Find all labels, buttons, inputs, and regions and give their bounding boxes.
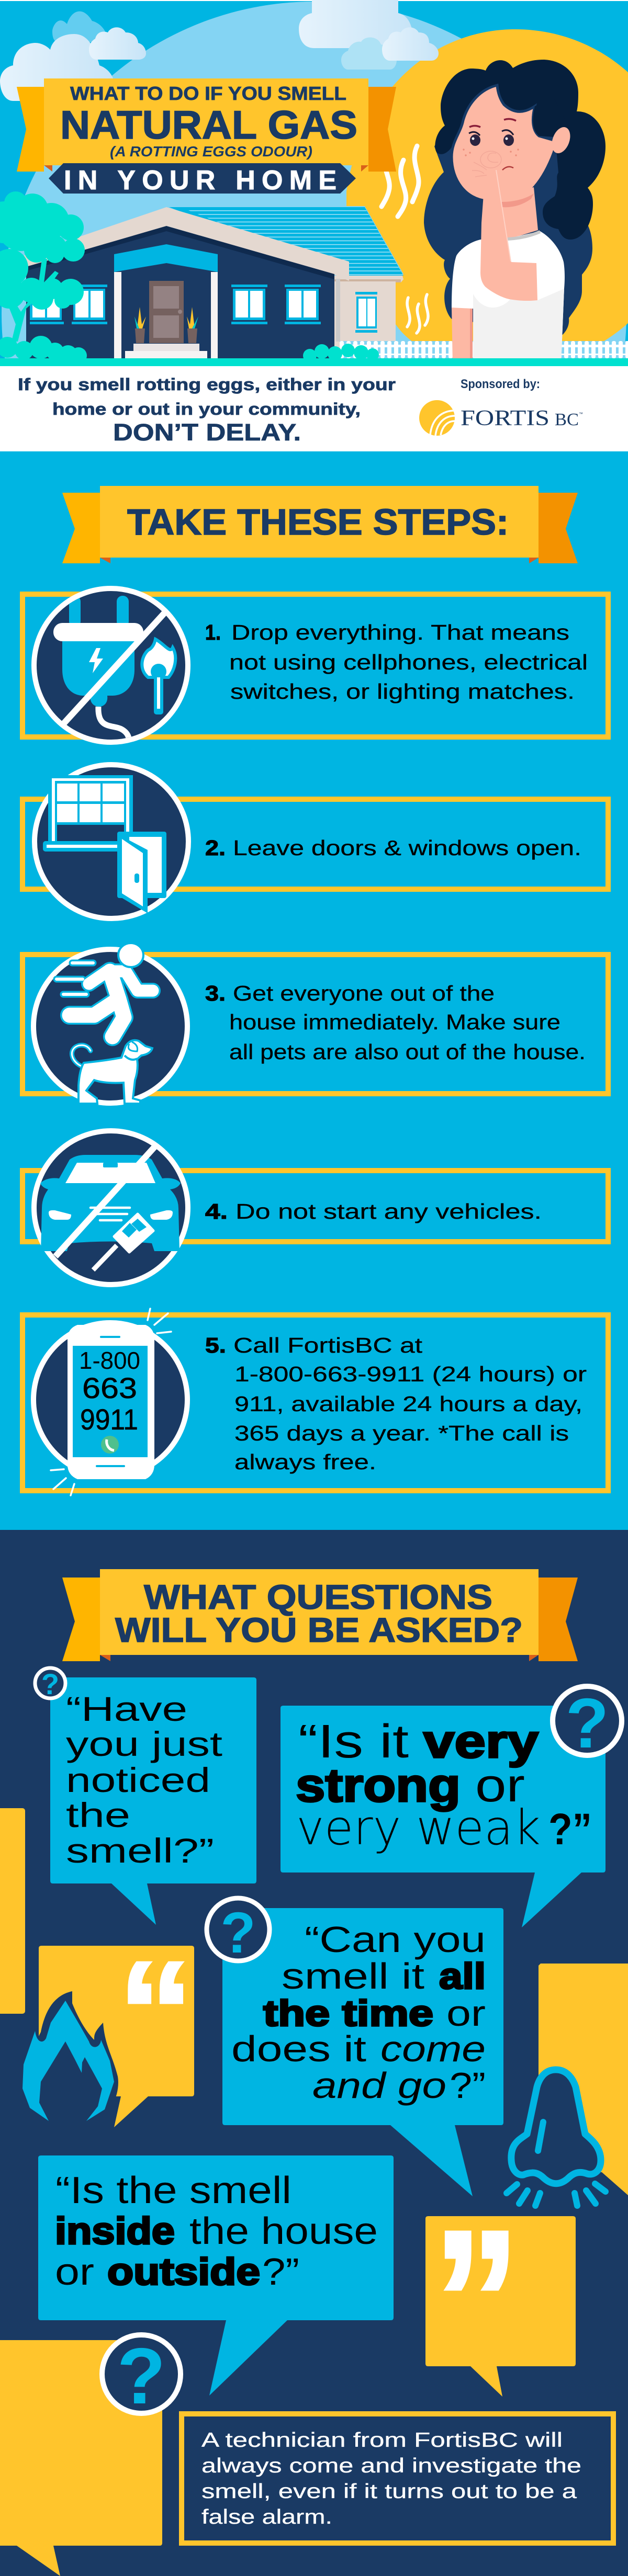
runner	[57, 963, 153, 1037]
bubble: inside or outside: ?”	[262, 2251, 299, 2293]
bubble: all the time: come	[380, 2028, 486, 2069]
step 2 text: 2.	[205, 836, 226, 860]
callout: technician note: smell, even if it turns out to be a	[201, 2480, 577, 2503]
door	[117, 832, 166, 913]
bubble: very strong or very weak: or	[475, 1760, 525, 1812]
yellow bubble behind nose	[539, 1964, 628, 2195]
bubble: have you just noticed: the	[66, 1796, 130, 1834]
door	[149, 281, 184, 343]
bubble: inside or outside: outside	[107, 2251, 260, 2293]
panel: hero illustration	[0, 0, 628, 366]
title text: NATURAL GAS	[60, 103, 357, 147]
yellow bubble: closing quote	[425, 2187, 576, 2417]
back hair	[424, 105, 592, 335]
t-shirt	[452, 231, 565, 365]
step 2 text: Leave doors & windows open.	[233, 836, 581, 860]
title text: WHAT TO DO IF YOU SMELL	[70, 83, 346, 104]
house back roof	[169, 207, 403, 358]
step 5 text: 365 days a year. *The call is	[234, 1421, 569, 1445]
windows	[30, 285, 321, 324]
bubble: inside or outside	[38, 2155, 394, 2396]
porch	[114, 244, 218, 358]
match	[142, 639, 175, 714]
eyes, brows, mouth	[463, 119, 519, 170]
step 3 text: Get everyone out of the	[233, 981, 495, 1005]
face	[452, 85, 557, 203]
phone number: 663	[82, 1371, 137, 1404]
step 3	[23, 943, 608, 1104]
step 5	[23, 1309, 608, 1495]
callout: technician note: false alarm.	[201, 2506, 332, 2528]
title text: IN YOUR HOME	[64, 165, 337, 196]
intro text: home or out in your community,	[52, 400, 361, 418]
step 3 text: 3.	[205, 981, 226, 1005]
bubble: very strong or very weak: ?”	[548, 1805, 592, 1854]
icon: no plug, no match	[34, 588, 188, 743]
intro text	[18, 375, 396, 446]
bubble: all the time: all	[439, 1956, 486, 1996]
bubble: inside or outside: inside	[55, 2210, 175, 2252]
sponsor block: Sponsored by:	[461, 377, 540, 391]
house front	[14, 207, 349, 358]
callout: technician note: A technician from FortisBC will	[201, 2429, 563, 2452]
ground strip	[0, 358, 628, 366]
extension window	[355, 292, 377, 333]
yellow stub left	[0, 1808, 25, 2014]
yellow bubble: opening quote: “	[118, 1932, 194, 2092]
clouds left	[0, 12, 146, 101]
icon: phone	[33, 1309, 187, 1495]
dark hair edge over ear	[533, 106, 555, 137]
bubble: have you just noticed: smell?”	[66, 1831, 214, 1870]
title ribbon	[17, 78, 396, 196]
picket fence	[340, 341, 628, 358]
icon: flame	[21, 1991, 118, 2126]
step 4 text: Do not start any vehicles.	[236, 1199, 542, 1223]
bubble: all the time: the time	[263, 1993, 433, 2034]
sponsor block: ™	[579, 412, 583, 416]
step 5 text: always free.	[234, 1450, 376, 1474]
bubble: have you just noticed: “Have	[66, 1689, 187, 1728]
bubble: all the time: smell it	[282, 1956, 424, 1996]
ear	[552, 127, 570, 153]
bubble: inside or outside: the house	[189, 2210, 378, 2252]
icon: medium question mark	[207, 1898, 270, 1965]
step 1 text: not using cellphones, electrical	[229, 650, 588, 674]
icon: no car, no key	[34, 1131, 188, 1285]
bubble: have you just noticed	[50, 1677, 256, 1925]
bubble: all the time: ?”	[450, 2065, 486, 2106]
icon: large question mark: ?	[566, 1684, 609, 1763]
heading ribbon: take these steps	[62, 486, 578, 563]
panel: questions	[0, 1530, 628, 2576]
car	[40, 1155, 181, 1251]
bubble: all the time: and go	[312, 2065, 446, 2106]
bubble: very strong or very weak: strong	[296, 1760, 461, 1812]
step 5 text: Call FortisBC at	[233, 1333, 423, 1357]
bubble: very strong or very weak: “Is it	[298, 1716, 409, 1768]
bubble: inside or outside: “Is the smell	[55, 2170, 291, 2211]
smell waves	[382, 146, 428, 333]
white info strip	[0, 366, 628, 451]
call button	[101, 1436, 119, 1454]
step 5 text	[205, 1333, 587, 1474]
yellow bubble bottom left	[0, 2340, 162, 2576]
sky circle	[2, 2, 626, 358]
yellow bubble: opening quote	[39, 1932, 194, 2127]
key	[93, 1214, 153, 1270]
step 3 text	[205, 981, 586, 1064]
heading ribbon: questions: WHAT QUESTIONS	[144, 1578, 492, 1616]
cloud over sun	[382, 27, 439, 61]
step 1 text: 1.	[205, 620, 221, 644]
icon: nose	[507, 2070, 605, 2206]
step 1	[23, 588, 608, 743]
callout: technician note: always come and investigate the	[201, 2455, 581, 2477]
icon: small question mark: ?	[41, 1667, 59, 1700]
chin shadow	[501, 194, 534, 207]
house wall	[26, 231, 334, 358]
step 5 text: 911, available 24 hours a day,	[234, 1392, 582, 1416]
bubble: very strong or very weak	[281, 1706, 605, 1927]
bubble: all the time	[222, 1908, 503, 2196]
icon: bottom question mark	[102, 2332, 181, 2421]
sponsor block: FORTIS	[461, 406, 550, 430]
bubble: very strong or very weak: very	[423, 1716, 539, 1768]
step 3 text: all pets are also out of the house.	[229, 1040, 586, 1064]
step 1 text: Drop everything. That means	[231, 620, 569, 644]
plant pots	[134, 307, 198, 343]
icon: small question mark	[35, 1667, 65, 1700]
step 4 text: 4.	[205, 1199, 228, 1223]
step 1 text: switches, or lighting matches.	[230, 679, 575, 703]
phone number: 1-800	[79, 1347, 140, 1374]
intro text: DON’T DELAY.	[113, 419, 301, 446]
window	[43, 775, 133, 852]
heading ribbon: questions: WILL YOU BE ASKED?	[115, 1610, 523, 1649]
icon: bottom question mark: ?	[117, 2332, 165, 2421]
collar	[508, 232, 540, 239]
woman holding her nose	[424, 60, 605, 365]
phone number: 9911	[80, 1403, 138, 1436]
gable roof	[14, 207, 349, 281]
step 1 text	[205, 620, 588, 703]
step 5 text: 5.	[205, 1333, 226, 1357]
icon: large question mark	[553, 1684, 622, 1763]
callout: technician note	[182, 2414, 613, 2543]
FortisBC logo mark	[419, 400, 455, 436]
neck	[501, 187, 538, 239]
title text	[60, 83, 357, 196]
bubble: all the time: “Can you	[305, 1919, 486, 1960]
heading ribbon: take these steps: TAKE THESE STEPS:	[127, 502, 509, 542]
heading ribbon: questions	[62, 1569, 578, 1661]
tree	[0, 191, 85, 342]
dog	[72, 1040, 152, 1104]
yellow bubble: closing quote: ”	[432, 2187, 521, 2417]
intro text: If you smell rotting eggs, either in your	[18, 375, 396, 394]
steps	[125, 344, 207, 358]
icon: medium question mark: ?	[220, 1901, 256, 1965]
bubble: have you just noticed: you just	[66, 1724, 222, 1763]
bubble: have you just noticed: noticed	[66, 1761, 210, 1799]
icon: running person and dog	[33, 943, 187, 1104]
fist	[472, 151, 501, 177]
step 3 text: house immediately. Make sure	[229, 1010, 560, 1034]
bubble: very strong or very weak: very weak	[296, 1800, 541, 1856]
bubble: all the time: does it	[231, 2028, 366, 2069]
step 5 text: 1-800-663-9911 (24 hours) or	[234, 1362, 587, 1386]
step 2	[23, 765, 608, 918]
title hexagon	[49, 163, 356, 194]
title text: (A ROTTING EGGS ODOUR)	[110, 143, 312, 160]
yellow sun circle	[346, 29, 628, 366]
arm	[480, 199, 537, 301]
sponsor block	[419, 377, 583, 436]
sponsor block: BC	[555, 410, 579, 429]
bushes	[0, 336, 379, 358]
clouds right	[299, 0, 414, 70]
icon: open window and door	[35, 765, 188, 918]
bubble: all the time: or	[446, 1993, 486, 2034]
step 4	[23, 1131, 608, 1285]
bubble: inside or outside: or	[55, 2251, 94, 2293]
phone number	[79, 1347, 140, 1436]
dark hair	[435, 60, 605, 240]
